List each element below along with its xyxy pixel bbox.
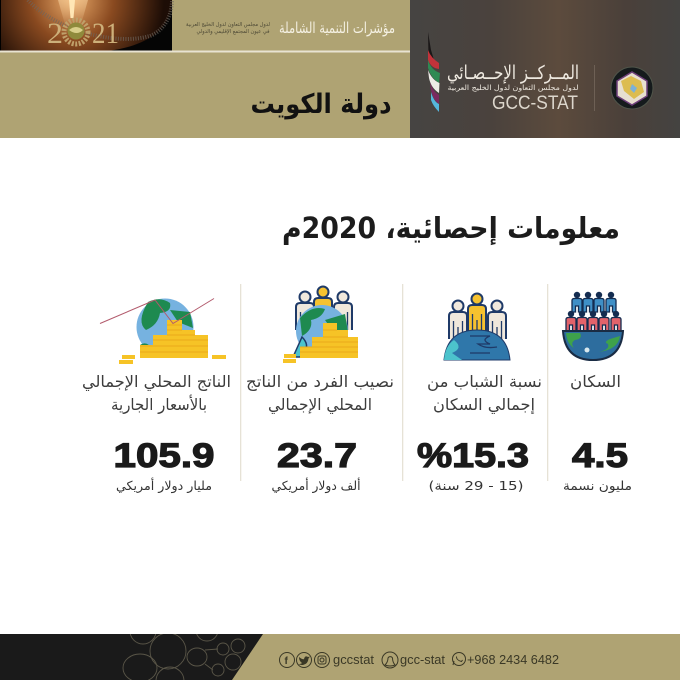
label: المحلي الإجمالي — [268, 395, 372, 415]
logo ribbon — [428, 32, 440, 112]
header gold panel — [0, 0, 410, 138]
panel: youth share — [417, 294, 542, 493]
panel: GDP per capita — [246, 286, 394, 494]
separator line — [0, 50, 410, 52]
social icons — [280, 652, 466, 668]
unit: مليار دولار أمريكي — [116, 477, 212, 494]
value: 23.7 — [277, 437, 357, 475]
unit: مليون نسمة — [563, 478, 632, 494]
2021 image panel — [0, 0, 172, 51]
value: 4.5 — [572, 437, 628, 475]
label: الناتج المحلي الإجمالي — [82, 372, 231, 392]
panel: population — [563, 292, 632, 494]
indicators heading: مؤشرات التنمية الشاملة — [279, 19, 395, 37]
facebook and twitter glyphs: f — [284, 656, 288, 667]
icon: youth on globe — [444, 294, 510, 360]
year 2021: 2 — [47, 17, 63, 50]
header band — [0, 0, 410, 138]
social handle and phone: +968 2434 6482 — [467, 653, 559, 667]
GCC emblem — [611, 67, 653, 109]
logo Arabic name: المــركــز الإحــصـائي — [447, 62, 579, 84]
small subtitle: لدول مجلس التعاون لدول الخليج العربية — [186, 22, 270, 28]
label: نصيب الفرد من الناتج — [246, 372, 394, 392]
icon: globe, coins and trend line — [100, 298, 226, 364]
facebook and twitter glyphs — [284, 656, 310, 667]
label — [427, 372, 542, 415]
value: %15.3 — [417, 437, 529, 475]
footer gold band — [0, 634, 680, 680]
logo Arabic subtitle: لدول مجلس التعاون لدول الخليج العربية — [448, 84, 578, 92]
social handle and phone: gccstat — [333, 653, 375, 667]
footer — [0, 634, 680, 680]
section heading: معلومات إحصائية، 2020م — [282, 211, 620, 246]
label: السكان — [570, 372, 621, 391]
label: إجمالي السكان — [433, 395, 535, 415]
2021 image panel: 21 — [92, 17, 119, 50]
brown logo panel — [410, 0, 680, 138]
unit: (15 - 29 سنة) — [428, 478, 524, 493]
panel: GDP — [82, 298, 231, 494]
icon: people on half globe — [563, 292, 623, 360]
social handle and phone: gcc-stat — [400, 653, 446, 667]
social handle and phone — [333, 653, 559, 667]
icon: people, globe and coins — [283, 286, 358, 363]
label — [246, 372, 394, 415]
small subtitle — [186, 22, 270, 35]
country title: دولة الكويت — [250, 89, 392, 120]
small subtitle: في عيون المجتمع الإقليمي والدولي — [196, 29, 270, 35]
label: نسبة الشباب من — [427, 372, 542, 392]
label — [82, 372, 231, 415]
logo GCC-STAT: GCC-STAT — [492, 93, 578, 114]
footer dark panel with circles — [0, 634, 263, 680]
value: 105.9 — [114, 437, 214, 475]
label: بالأسعار الجارية — [111, 394, 207, 415]
column dividers — [240, 284, 548, 481]
unit: ألف دولار أمريكي — [272, 477, 360, 494]
